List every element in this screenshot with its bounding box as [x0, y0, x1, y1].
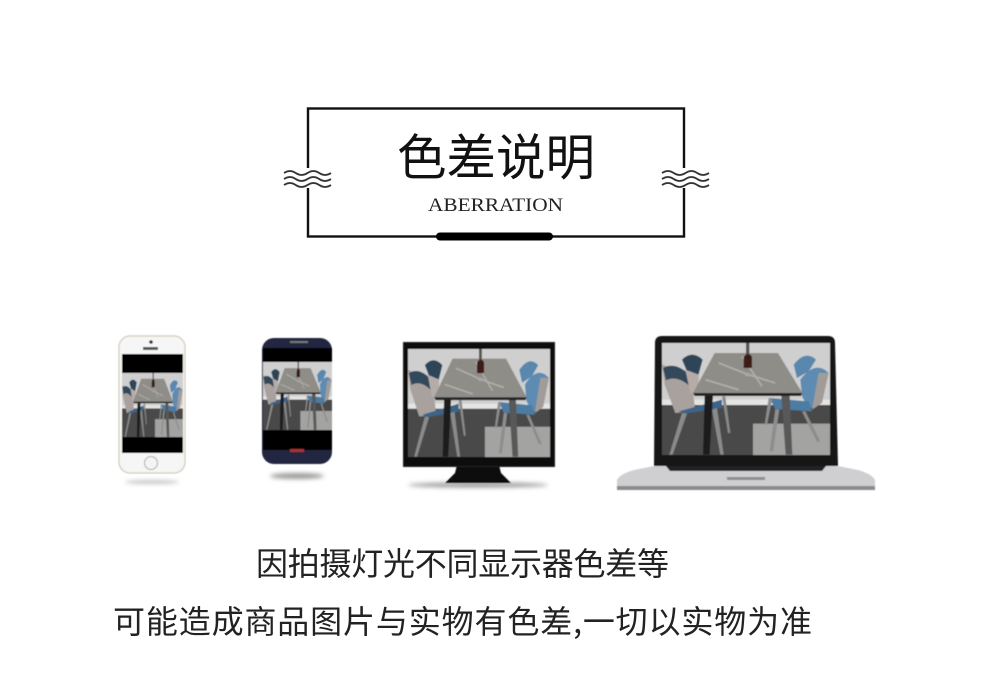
icon: left waves — [284, 168, 331, 188]
subtitle: ABERRATION — [428, 195, 563, 216]
device: white smartphone — [119, 336, 185, 484]
device: dark smartphone — [262, 338, 332, 479]
caption line 2: 可能造成商品图片与实物有色差,一切以实物为准 — [113, 597, 812, 643]
thick bottom bar — [436, 232, 553, 240]
device: desktop monitor — [403, 342, 555, 488]
title heading: 色差说明 — [397, 119, 595, 190]
title frame — [308, 108, 684, 240]
icon: right waves — [662, 168, 709, 188]
device: laptop — [617, 336, 875, 490]
caption line 1: 因拍摄灯光不同显示器色差等 — [256, 539, 669, 585]
